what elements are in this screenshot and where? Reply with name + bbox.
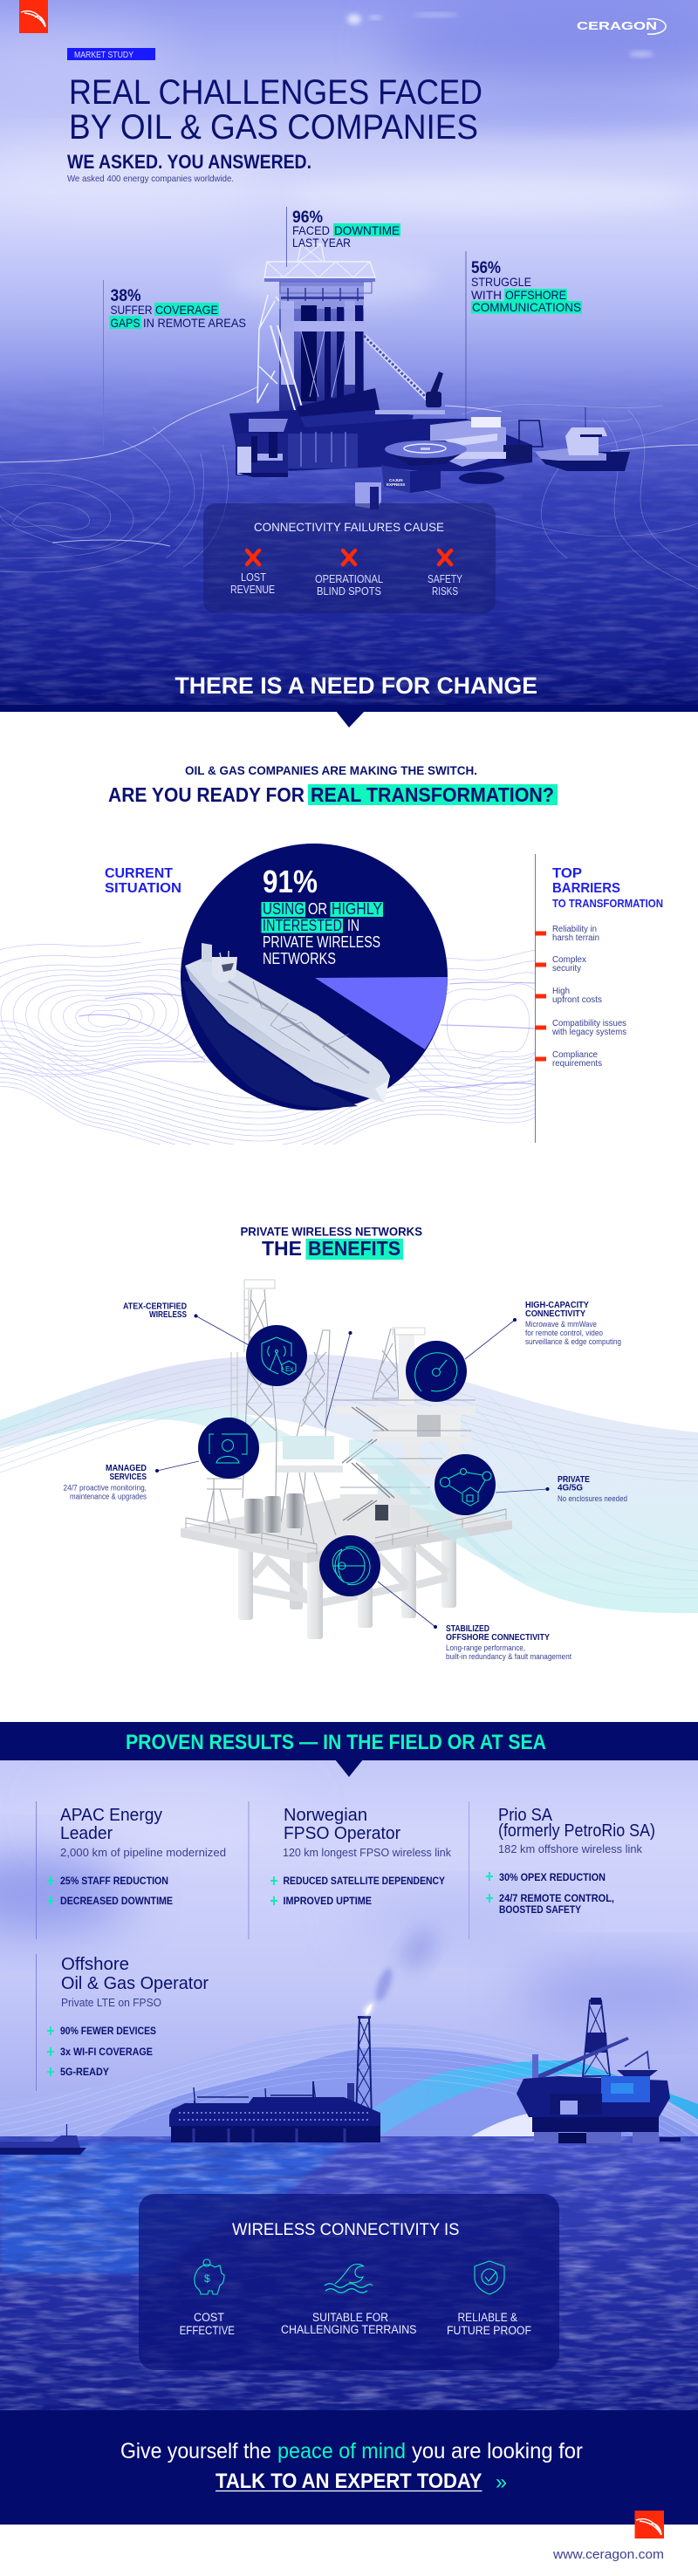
callout: stabilized offshore connectivity: built-in redundancy & fault management bbox=[446, 1652, 572, 1661]
crane boom bbox=[364, 336, 443, 407]
callout: private 4g/5g bbox=[435, 1454, 627, 1515]
result: wi-fi coverage: 3x WI-FI COVERAGE bbox=[60, 2047, 153, 2058]
banner: there is a need for change bbox=[0, 673, 698, 728]
barrier: compatibility bbox=[535, 1019, 626, 1037]
case: prio sa: (formerly PetroRio SA) bbox=[498, 1821, 655, 1841]
stat: 38% coverage gaps: GAPS bbox=[110, 316, 140, 330]
modular decks and stairs bbox=[277, 1400, 476, 1528]
barrier: high upfront costs: upfront costs bbox=[552, 995, 602, 1005]
helideck bbox=[385, 441, 467, 466]
stat: 56% offshore communications bbox=[466, 251, 582, 419]
oil rig photo bbox=[227, 244, 630, 509]
heading: the benefits bbox=[241, 1225, 422, 1260]
stat: 56% offshore communications: OFFSHORE bbox=[505, 288, 566, 302]
pie callout text: PRIVATE WIRELESS bbox=[263, 933, 380, 951]
illustration: offshore platform bbox=[181, 1280, 532, 1639]
pie slice 9 percent bbox=[315, 977, 448, 1049]
barrier: compatibility: Compatibility issues bbox=[552, 1019, 626, 1028]
label: lost revenue: LOST bbox=[241, 571, 266, 584]
label: lost revenue: REVENUE bbox=[230, 584, 275, 596]
barrier: reliability: Reliability in bbox=[552, 925, 597, 934]
case: norwegian fpso operator bbox=[249, 1801, 451, 1939]
label: reliable and future proof: RELIABLE & bbox=[457, 2311, 517, 2324]
icon: plus bbox=[270, 1896, 277, 1905]
contour line background bbox=[0, 942, 535, 1145]
lattice towers bbox=[207, 1280, 399, 1544]
banner: there is a need for change: THERE IS A NEED FOR CHANGE bbox=[174, 673, 537, 699]
heading: making the switch bbox=[108, 763, 558, 806]
icon: private network nodes bbox=[435, 1454, 496, 1515]
panel: connectivity failures cause bbox=[203, 503, 496, 613]
result: 5g ready: 5G-READY bbox=[60, 2067, 109, 2078]
cta link: » bbox=[496, 2470, 507, 2494]
tanks bbox=[244, 1493, 304, 1534]
label: operational blind spots bbox=[315, 573, 383, 598]
icon: plus bbox=[47, 1896, 54, 1905]
callout: high-capacity connectivity: CONNECTIVITY bbox=[525, 1308, 585, 1319]
stat: 96% downtime: FACED bbox=[292, 223, 330, 237]
teal ribbon overlay bbox=[349, 1439, 532, 1581]
barrier: complex security bbox=[535, 955, 586, 974]
label: safety risks: SAFETY bbox=[428, 573, 463, 585]
barrier: high upfront costs: High bbox=[552, 987, 570, 996]
red logo mark footer bbox=[635, 2511, 664, 2538]
callout: private 4g/5g: 4G/5G bbox=[558, 1483, 583, 1493]
callout: central mast leader bbox=[325, 1331, 352, 1428]
label: lost revenue bbox=[230, 571, 275, 596]
barrier: reliability: harsh terrain bbox=[552, 933, 599, 943]
result: fewer devices: 90% FEWER DEVICES bbox=[60, 2026, 156, 2037]
result: remote control and safety bbox=[499, 1894, 614, 1916]
label: current situation: SITUATION bbox=[105, 881, 181, 896]
result: opex reduction: 30% OPEX REDUCTION bbox=[499, 1873, 606, 1883]
callout: high-capacity connectivity: surveillance & edge computing bbox=[525, 1337, 621, 1346]
barrier: compatibility: with legacy systems bbox=[551, 1028, 626, 1037]
icon: speedometer gauge bbox=[406, 1341, 467, 1402]
pie base bbox=[181, 844, 448, 1110]
icon: shield with antenna: Ex bbox=[285, 1365, 293, 1373]
cta tagline: you are looking for bbox=[412, 2439, 583, 2463]
panel: call to action footer bbox=[0, 2410, 698, 2525]
wave ribbons behind platform bbox=[0, 1355, 698, 1613]
case: apac energy leader: Leader bbox=[60, 1824, 113, 1843]
callout: high-capacity connectivity bbox=[406, 1300, 621, 1402]
icon: plus bbox=[270, 1876, 277, 1885]
case: norwegian fpso operator: FPSO Operator bbox=[284, 1824, 400, 1843]
icon: plus bbox=[47, 2047, 54, 2056]
subtitle bbox=[67, 151, 311, 184]
case: offshore oil and gas operator bbox=[37, 1954, 209, 2091]
label: suitable for challenging terrains: SUITABLE FOR bbox=[312, 2311, 388, 2324]
exhaust stack bbox=[393, 1328, 425, 1404]
stat: 96% downtime: LAST YEAR bbox=[292, 236, 351, 249]
case: offshore oil and gas operator: Offshore bbox=[61, 1955, 129, 1974]
platform braces bbox=[246, 1547, 448, 1602]
list: top barriers bbox=[535, 854, 663, 1143]
heading: making the switch: REAL TRANSFORMATION? bbox=[311, 783, 554, 806]
platform front legs bbox=[238, 1548, 373, 1639]
bright wave lines on the sea bbox=[0, 386, 698, 546]
barrier: reliability bbox=[535, 925, 599, 943]
callout: atex-certified wireless: WIRELESS bbox=[149, 1309, 187, 1320]
barrier: complex security: Complex bbox=[552, 955, 586, 965]
stat: 56% offshore communications: COMMUNICATIONS bbox=[472, 300, 581, 314]
title: BY OIL & GAS COMPANIES bbox=[69, 108, 478, 147]
icon: dollar sign: $ bbox=[204, 2272, 210, 2285]
heading: making the switch: ARE YOU READY FOR bbox=[108, 783, 305, 806]
label: cost effective bbox=[180, 2311, 235, 2337]
fpso ship and flare bbox=[169, 2001, 380, 2142]
Ceragon wordmark: CERAGON bbox=[577, 19, 657, 32]
pie callout text: INTERESTED bbox=[263, 917, 342, 934]
label: cost effective: COST bbox=[194, 2311, 224, 2324]
barriers heading bbox=[552, 866, 663, 910]
stat: 96% downtime: 96% bbox=[292, 208, 323, 227]
icon: plus bbox=[47, 2067, 54, 2076]
icon: plus bbox=[47, 2026, 54, 2035]
callout: high-capacity connectivity: for remote control, video bbox=[525, 1329, 603, 1337]
drilling platform bbox=[517, 1998, 681, 2143]
callout: stabilized offshore connectivity: STABILIZED bbox=[446, 1623, 489, 1634]
stat: 56% offshore communications: STRUGGLE bbox=[471, 275, 531, 289]
case: apac energy leader: APAC Energy bbox=[60, 1806, 162, 1825]
case: prio sa: Prio SA bbox=[498, 1806, 553, 1825]
banner: proven results: PROVEN RESULTS — IN THE FIELD OR AT SEA bbox=[126, 1731, 546, 1754]
panel: hero market study bbox=[0, 0, 698, 712]
result: staff reduction: 25% STAFF REDUCTION bbox=[60, 1876, 168, 1887]
result: decreased downtime: DECREASED DOWNTIME bbox=[60, 1896, 173, 1907]
case: norwegian fpso operator: 120 km longest FPSO wireless link bbox=[283, 1846, 451, 1859]
label: cost effective: EFFECTIVE bbox=[180, 2324, 235, 2337]
barriers heading: TO TRANSFORMATION bbox=[552, 898, 663, 910]
panel: wireless connectivity is: WIRELESS CONNECTIVITY IS bbox=[232, 2221, 459, 2239]
hero photo background: sky and sea bbox=[0, 0, 698, 712]
market study tag bbox=[67, 48, 155, 60]
stat: 56% offshore communications: WITH bbox=[471, 288, 502, 302]
supply vessel bbox=[535, 407, 630, 471]
label: reliable and future proof bbox=[447, 2311, 531, 2337]
icon: red x operational blind spots bbox=[343, 550, 355, 564]
pie callout text: OR bbox=[308, 900, 327, 918]
subtitle: We asked 400 energy companies worldwide. bbox=[67, 174, 234, 184]
results background sea bbox=[0, 2136, 698, 2410]
result: remote control and safety: BOOSTED SAFETY bbox=[499, 1905, 581, 1916]
stat: 38% coverage gaps: IN REMOTE AREAS bbox=[143, 316, 246, 330]
callout: stabilized offshore connectivity: Long-range performance, bbox=[446, 1643, 525, 1652]
title: REAL CHALLENGES FACED bbox=[69, 73, 482, 112]
barrier: compliance: Compliance bbox=[552, 1050, 598, 1060]
result: improved uptime: IMPROVED UPTIME bbox=[283, 1896, 372, 1907]
icon: monitor with person bbox=[198, 1418, 259, 1479]
callout: private 4g/5g: PRIVATE bbox=[558, 1474, 590, 1485]
label: suitable for challenging terrains: CHALLENGING TERRAINS bbox=[281, 2323, 417, 2336]
callout: managed services bbox=[63, 1418, 259, 1500]
case: apac energy leader: 2,000 km of pipeline modernized bbox=[60, 1846, 226, 1859]
cta tagline bbox=[120, 2439, 583, 2463]
callout: atex-certified wireless bbox=[123, 1302, 307, 1386]
icon: red x safety risks bbox=[439, 550, 451, 564]
callout: atex-certified wireless: ATEX-CERTIFIED bbox=[123, 1302, 187, 1312]
stat: 38% coverage gaps bbox=[103, 280, 246, 445]
rig derrick tower bbox=[257, 244, 375, 416]
website url: www.ceragon.com bbox=[552, 2547, 664, 2562]
icon: plus bbox=[486, 1894, 493, 1903]
rig main deck and pontoons bbox=[229, 388, 543, 509]
barrier: compliance bbox=[535, 1050, 602, 1069]
case: apac energy leader bbox=[37, 1801, 226, 1939]
subtitle: WE ASKED. YOU ANSWERED. bbox=[67, 151, 311, 173]
label: current situation: CURRENT bbox=[105, 866, 173, 881]
pie callout text: USING bbox=[263, 900, 305, 918]
pie callout text: NETWORKS bbox=[263, 950, 336, 967]
panel: wireless connectivity is bbox=[139, 2194, 559, 2370]
rig main deck and pontoons: CAJUN bbox=[389, 478, 403, 482]
panel: connectivity failures cause: CONNECTIVITY FAILURES CAUSE bbox=[254, 520, 444, 534]
icon: plus bbox=[47, 1876, 54, 1885]
rig main deck and pontoons: EXPRESS bbox=[387, 482, 405, 487]
banner: proven results bbox=[0, 1722, 698, 1777]
stat: 56% offshore communications: 56% bbox=[471, 259, 501, 277]
callout: managed services: maintenance & upgrades bbox=[70, 1492, 147, 1500]
callout: managed services: MANAGED bbox=[106, 1463, 147, 1473]
cta link: TALK TO AN EXPERT TODAY bbox=[216, 2470, 482, 2493]
result: reduced satellite dependency: REDUCED SATELLITE DEPENDENCY bbox=[283, 1876, 445, 1887]
heading: making the switch: OIL & GAS COMPANIES ARE MAKING THE SWITCH. bbox=[185, 763, 477, 777]
icon: gyro dish bbox=[319, 1535, 380, 1596]
icon: plus bbox=[486, 1872, 493, 1881]
barrier: high upfront costs bbox=[535, 987, 602, 1005]
result: remote control and safety: 24/7 REMOTE CONTROL, bbox=[499, 1894, 614, 1904]
icon: red x lost revenue bbox=[247, 550, 259, 564]
stat: 38% coverage gaps: 38% bbox=[110, 287, 141, 305]
label: suitable for challenging terrains bbox=[281, 2311, 417, 2336]
icon: piggy bank bbox=[195, 2259, 224, 2294]
cta tagline: Give yourself the bbox=[120, 2439, 271, 2463]
heading: the benefits: THE bbox=[262, 1237, 302, 1260]
market study tag: MARKET STUDY bbox=[74, 50, 133, 60]
barrier: complex security: security bbox=[552, 964, 581, 974]
case: offshore oil and gas operator: Private LTE on FPSO bbox=[61, 1996, 161, 2009]
results background sky bbox=[0, 1760, 698, 2137]
heading: the benefits: PRIVATE WIRELESS NETWORKS bbox=[241, 1225, 422, 1239]
pie callout text: 91% bbox=[263, 864, 318, 899]
panel: proven results bbox=[0, 1722, 698, 2410]
case: prio sa: 182 km offshore wireless link bbox=[498, 1842, 642, 1855]
title bbox=[69, 73, 482, 147]
label: safety risks bbox=[428, 573, 463, 598]
callout: high-capacity connectivity: Microwave & mmWave bbox=[525, 1320, 597, 1329]
icon: shield with antenna bbox=[246, 1325, 307, 1386]
stat: 38% coverage gaps: COVERAGE bbox=[155, 303, 218, 317]
case: norwegian fpso operator: Norwegian bbox=[284, 1806, 367, 1825]
heading: the benefits: BENEFITS bbox=[308, 1237, 400, 1260]
pie callout text bbox=[262, 864, 383, 967]
stat: 38% coverage gaps: SUFFER bbox=[110, 303, 152, 317]
stat: 96% downtime bbox=[286, 207, 400, 267]
callout: high-capacity connectivity: HIGH-CAPACITY bbox=[525, 1300, 589, 1310]
label: reliable and future proof: FUTURE PROOF bbox=[447, 2324, 531, 2337]
label: safety risks: RISKS bbox=[432, 585, 458, 598]
pie callout text: IN bbox=[347, 917, 359, 934]
cta tagline: peace of mind bbox=[277, 2439, 406, 2463]
icon: shield check bbox=[475, 2261, 504, 2294]
callout: stabilized offshore connectivity: OFFSHORE CONNECTIVITY bbox=[446, 1632, 550, 1643]
case: prio sa bbox=[469, 1801, 655, 1939]
icon: tanker ship bbox=[182, 943, 390, 1108]
callout: managed services: 24/7 proactive monitoring, bbox=[63, 1483, 147, 1492]
callout: managed services: SERVICES bbox=[110, 1472, 147, 1482]
callout: stabilized offshore connectivity bbox=[319, 1535, 572, 1661]
barrier: compliance: requirements bbox=[552, 1059, 602, 1069]
contour lines on the sea bbox=[0, 404, 698, 589]
small red logo mark bbox=[19, 0, 48, 33]
callout: private 4g/5g: No enclosures needed bbox=[558, 1494, 627, 1503]
pie callout text: HIGHLY bbox=[332, 900, 382, 918]
barriers heading: TOP bbox=[552, 866, 582, 881]
label: operational blind spots: OPERATIONAL bbox=[315, 573, 383, 585]
wave arc overlay bbox=[0, 2024, 698, 2136]
Ceragon wordmark bbox=[577, 19, 666, 34]
label: operational blind spots: BLIND SPOTS bbox=[317, 585, 381, 598]
case: offshore oil and gas operator: Oil & Gas Operator bbox=[61, 1974, 209, 1993]
label: current situation bbox=[105, 866, 181, 896]
stat: 96% downtime: DOWNTIME bbox=[334, 223, 400, 237]
barriers heading: BARRIERS bbox=[552, 881, 620, 896]
main deck bbox=[181, 1498, 512, 1563]
icon: ocean wave bbox=[325, 2265, 373, 2292]
small vessel bbox=[0, 2124, 86, 2155]
platform back legs bbox=[290, 1535, 456, 1618]
chart: 91 percent pie bbox=[181, 844, 448, 1110]
